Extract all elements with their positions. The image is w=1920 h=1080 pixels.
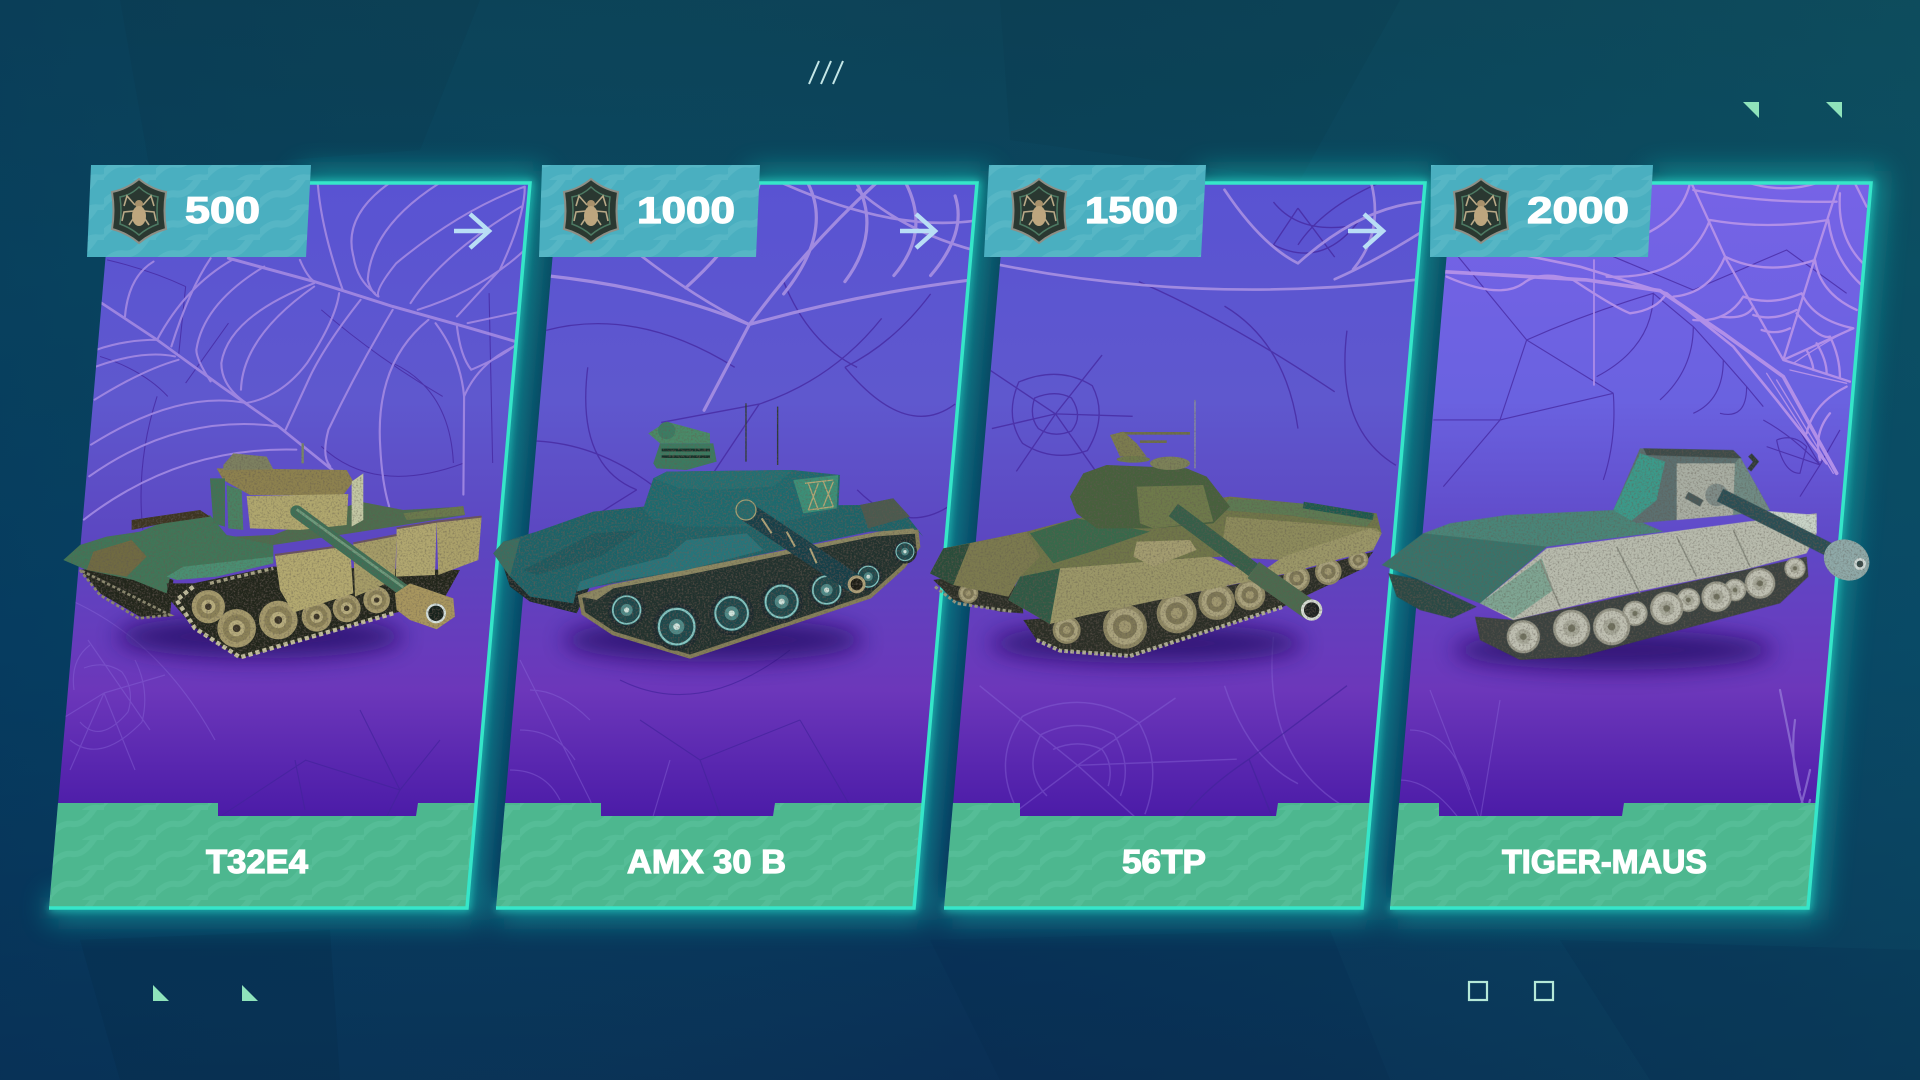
card background <box>1390 183 1871 908</box>
neon border <box>1390 183 1871 908</box>
tank: TIGER-MAUS <box>1382 448 1876 670</box>
icon: spider emblem <box>564 179 618 243</box>
tank name: AMX 30 B <box>627 843 786 880</box>
cobweb decoration <box>510 184 977 880</box>
icon: arrow <box>454 214 489 248</box>
cobweb decoration <box>60 183 525 830</box>
panel: TIGER-MAUS card <box>1382 165 1876 908</box>
neon border <box>944 183 1425 908</box>
tank: T32E4 <box>63 443 482 658</box>
decoration: top right triangles <box>1743 102 1842 118</box>
icon: spider emblem <box>1012 179 1066 243</box>
decoration: slashes <box>809 61 843 84</box>
neon border <box>49 183 530 908</box>
panel: 56TP card <box>930 165 1425 910</box>
cobweb decoration <box>1401 180 1868 816</box>
card background <box>496 183 977 908</box>
tank: 56TP <box>930 400 1382 663</box>
icon: spider emblem <box>1454 179 1508 243</box>
reward amount: 1000 <box>637 190 735 231</box>
cobweb decoration <box>979 180 1422 816</box>
reward amount: 2000 <box>1527 190 1629 231</box>
reward badge <box>1430 165 1653 257</box>
tank: AMX 30 B <box>493 403 923 662</box>
name band <box>944 803 1371 908</box>
panel: card glows <box>49 183 1871 908</box>
tank name: T32E4 <box>206 843 309 880</box>
reward badge <box>539 165 760 257</box>
reward amount: 500 <box>185 190 260 231</box>
reward amount: 1500 <box>1085 190 1178 231</box>
neon border <box>496 183 977 908</box>
decoration: bottom left triangles <box>153 985 258 1001</box>
tank name: 56TP <box>1122 843 1206 880</box>
panel: AMX 30 B card <box>493 165 977 908</box>
icon: arrow <box>1348 214 1383 248</box>
icon: spider emblem <box>112 179 166 243</box>
panel: T32E4 card <box>49 165 530 908</box>
card background <box>49 183 530 908</box>
name band <box>49 803 476 908</box>
tank name: TIGER-MAUS <box>1502 843 1707 880</box>
reward badge <box>87 165 311 257</box>
card background <box>944 183 1425 908</box>
name band <box>496 803 923 908</box>
name band <box>1390 803 1817 908</box>
reward badge <box>984 165 1206 257</box>
decoration: outlined squares <box>1469 982 1553 1000</box>
icon: arrow <box>900 214 935 248</box>
